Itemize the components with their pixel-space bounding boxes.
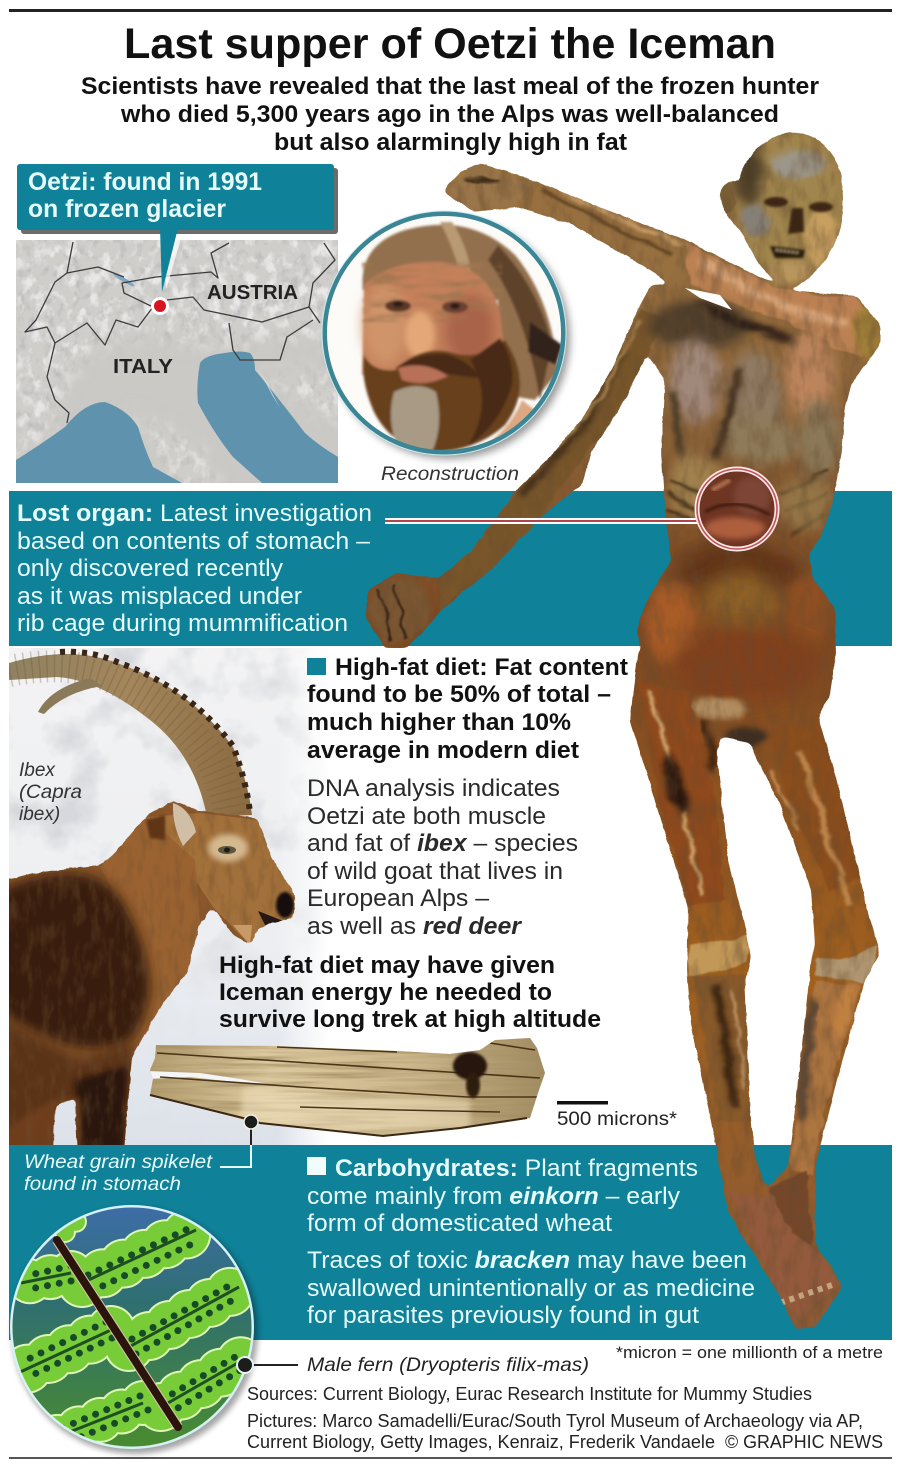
portrait: reconstruction: [320, 210, 570, 468]
arms: [517, 182, 683, 280]
connector: wheat spikelet: [220, 1115, 258, 1167]
heading: high-fat diet: High-fat diet: Fat content: [335, 654, 628, 681]
text: lost organ: Lost organ: Latest investigation: [17, 500, 372, 527]
text: DNA analysis: Oetzi ate both muscle: [307, 803, 546, 830]
subtitle: but also alarmingly high in fat: [274, 129, 627, 156]
legs: [640, 680, 725, 908]
text: carbohydrates: Carbohydrates: Plant fragments: [335, 1155, 698, 1182]
label: wheat grain spikelet: found in stomach: [24, 1174, 181, 1195]
text: DNA analysis: DNA analysis indicates: [307, 775, 560, 802]
text: carbohydrates: swallowed unintentionally or as medicine: [307, 1275, 755, 1302]
callout: found in 1991: Oetzi: found in 1991: [28, 168, 262, 196]
map label: Austria: AUSTRIA: [207, 282, 298, 304]
text: lost organ: rib cage during mummification: [17, 610, 348, 637]
text: energy conclusion: [219, 952, 601, 1033]
scale bar: [557, 1101, 678, 1130]
text: DNA analysis: of wild goat that lives in: [307, 858, 563, 885]
top rule: [9, 9, 892, 12]
text: lost organ: as it was misplaced under: [17, 583, 302, 610]
subtitle: [81, 73, 819, 156]
label: wheat grain spikelet: [24, 1152, 213, 1195]
text: carbohydrates: form of domesticated wheat: [307, 1210, 612, 1237]
text: carbohydrates: [307, 1155, 755, 1329]
heading: high-fat diet: much higher than 10%: [307, 709, 571, 736]
text: lost organ: based on contents of stomach –: [17, 528, 371, 555]
title: Last supper of Oetzi the Iceman: [124, 20, 776, 68]
map of the Alps: [16, 240, 338, 483]
text: energy conclusion: High-fat diet may have given: [219, 952, 555, 979]
label: ibex species: ibex): [19, 804, 60, 825]
panel: lost organ band: [9, 491, 892, 646]
heading: high-fat diet: found to be 50% of total –: [307, 681, 611, 708]
sources and credits: Current Biology, Getty Images, Kenraiz, Frederik Vandaele: [247, 1432, 715, 1452]
photo: wheat grain spikelet: [150, 1038, 545, 1137]
location marker: [151, 297, 169, 315]
photo: male fern: [10, 1205, 258, 1454]
sources and credits: Pictures: Marco Samadelli/Eurac/South Tyrol Museum of Archaeology via AP,: [247, 1411, 863, 1431]
mummy face features: [764, 197, 833, 258]
text: energy conclusion: Iceman energy he needed to: [219, 979, 552, 1006]
heading: high-fat diet: average in modern diet: [307, 737, 579, 764]
head shading: [715, 127, 845, 283]
footnote: micron: *micron = one millionth of a metre: [616, 1343, 883, 1362]
photo: ibex: [0, 648, 329, 1160]
subtitle: Scientists have revealed that the last meal of the frozen hunter: [81, 73, 819, 100]
mummy of Oetzi: [350, 120, 900, 1340]
torso: [650, 300, 750, 350]
text: lost organ: only discovered recently: [17, 555, 283, 582]
label: male fern: Male fern (Dryopteris filix-mas): [307, 1355, 589, 1376]
text: carbohydrates: come mainly from einkorn – early: [307, 1183, 680, 1210]
callout: found in 1991: [17, 164, 338, 292]
callout: found in 1991: on frozen glacier: [28, 195, 226, 223]
subtitle: who died 5,300 years ago in the Alps was well-balanced: [120, 101, 779, 128]
text: lost organ: [17, 500, 372, 637]
label: ibex species: Ibex: [19, 760, 56, 781]
sources and credits: © GRAPHIC NEWS: [725, 1432, 883, 1452]
label: wheat grain spikelet: Wheat grain spikelet: [24, 1152, 213, 1173]
label: ibex species: (Capra: [19, 782, 82, 803]
sources and credits: Sources: Current Biology, Eurac Research Institute for Mummy Studies: [247, 1384, 812, 1404]
text: energy conclusion: survive long trek at high altitude: [219, 1006, 601, 1033]
toes: [780, 1284, 835, 1303]
heading: high-fat diet: [307, 654, 628, 764]
text: DNA analysis: European Alps –: [307, 885, 490, 912]
marker: stomach location: [385, 469, 777, 549]
caption: reconstruction: Reconstruction: [381, 464, 519, 485]
label: ibex species: [19, 760, 82, 825]
scale bar: 500 microns*: [557, 1109, 678, 1130]
text: carbohydrates: Traces of toxic bracken may have been: [307, 1247, 747, 1274]
text: DNA analysis: and fat of ibex – species: [307, 830, 578, 857]
text: carbohydrates: for parasites previously found in gut: [307, 1302, 699, 1329]
bottom rule: [9, 1457, 892, 1459]
panel: carbohydrates band: [9, 1145, 892, 1340]
sources and credits: [247, 1384, 883, 1452]
map label: Italy: ITALY: [113, 356, 174, 378]
text: DNA analysis: [307, 775, 578, 940]
text: DNA analysis: as well as red deer: [307, 913, 523, 940]
